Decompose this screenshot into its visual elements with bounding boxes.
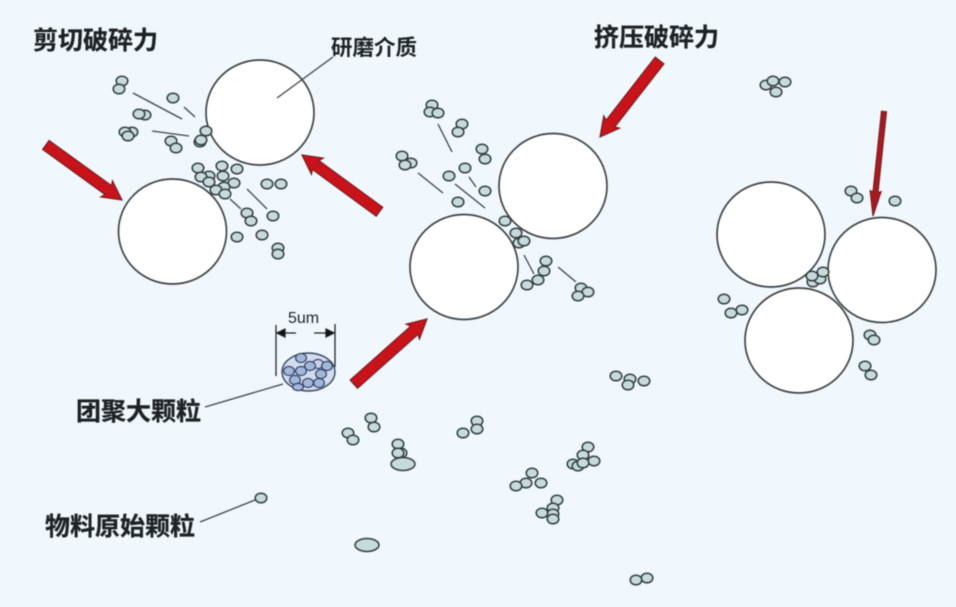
agglomerate particle — [282, 353, 335, 391]
grinding media balls — [118, 60, 314, 284]
particles: compression zone — [396, 100, 594, 301]
arrow: upper compression — [592, 54, 667, 143]
fragment motion lines — [133, 93, 267, 209]
particles: scattered raw material — [255, 371, 653, 585]
panel: raw material particles — [45, 371, 653, 585]
leader: grinding media — [277, 57, 333, 98]
heading: compression force: 挤压破碎力 — [594, 24, 719, 52]
fragment motion lines — [418, 124, 576, 282]
grinding balls pair — [410, 134, 607, 320]
leader: raw particle — [200, 500, 255, 522]
heading: shear force: 剪切破碎力 — [33, 27, 158, 55]
label: large agglomerate: 团聚大颗粒 — [76, 398, 201, 426]
panel: shear crushing force — [33, 27, 417, 284]
panel: compression crushing force, two balls — [347, 24, 719, 392]
arrow: left force — [40, 137, 128, 208]
label: grinding media: 研磨介质 — [331, 36, 417, 60]
panel: compression, three balls — [717, 76, 936, 393]
scale label: 5um — [288, 310, 319, 327]
particles: right zone — [718, 76, 901, 380]
particles: shear zone — [113, 76, 287, 259]
panel: large agglomerate with scale — [76, 310, 335, 426]
scale bracket — [276, 324, 335, 376]
arrow: downward force — [868, 111, 889, 217]
label: raw particles: 物料原始颗粒 — [45, 513, 195, 541]
leader: agglomerate — [205, 384, 283, 407]
arrow: right force — [296, 147, 385, 220]
arrow: feed into gap — [347, 312, 434, 392]
grinding balls trio — [717, 182, 936, 393]
